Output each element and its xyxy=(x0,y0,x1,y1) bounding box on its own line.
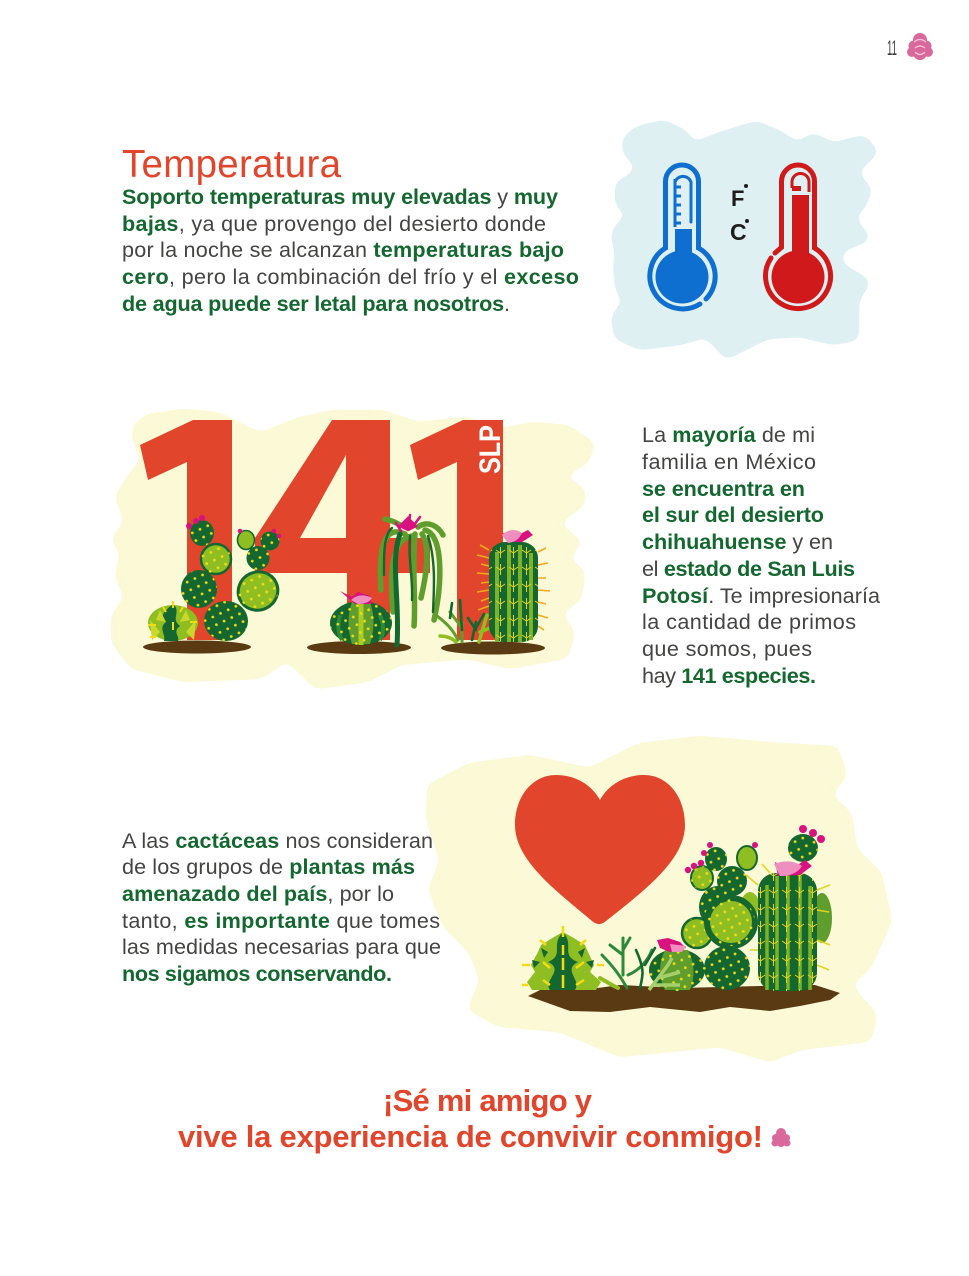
illustration: heart and cacti xyxy=(430,740,888,1058)
text block: family in Mexico: hay 141 especies. xyxy=(642,663,816,688)
text block: family in Mexico: chihuahuense y en xyxy=(642,529,833,554)
soil xyxy=(528,985,840,1012)
text block: family in Mexico: Potosí. Te impresionaría xyxy=(642,583,881,608)
heart xyxy=(515,775,685,924)
text block: threatened cacti: A las cactáceas nos consideran xyxy=(122,828,433,853)
text: 11 xyxy=(887,37,897,60)
branched cactus xyxy=(600,938,655,988)
hanging cactus xyxy=(380,515,443,645)
prickly pear cactus xyxy=(682,842,759,990)
title: Temperatura xyxy=(122,143,342,186)
text block: threatened cacti: amenazado del país, por lo xyxy=(122,881,394,906)
closing message: vive la experiencia de convivir conmigo! xyxy=(178,1119,763,1154)
text block: family in Mexico: la cantidad de primos xyxy=(642,609,856,634)
text block: family in Mexico: el estado de San Luis xyxy=(642,556,855,581)
scale labels xyxy=(730,184,749,245)
text block: temperature: de agua puede ser letal para nosotros. xyxy=(122,291,510,316)
text block: temperature: Soporto temperaturas muy elevadas y muy xyxy=(122,184,558,209)
text block: family in Mexico: La mayoría de mi xyxy=(642,422,815,447)
small round cactus xyxy=(148,601,198,641)
soil mounds xyxy=(143,640,545,654)
text block: temperature xyxy=(122,184,579,316)
tall columnar cactus with flower xyxy=(477,530,550,642)
illustration: 141 species xyxy=(115,413,591,685)
text block: family in Mexico xyxy=(642,422,881,688)
yellow paint background xyxy=(430,740,888,1058)
yellow paint background xyxy=(115,413,591,685)
text block: temperature: cero, pero la combinación del frío y el exceso xyxy=(122,264,579,289)
text block: family in Mexico: el sur del desierto xyxy=(642,502,824,527)
scale labels: C xyxy=(730,219,747,245)
prickly pear cactus xyxy=(181,515,284,641)
text block: threatened cacti: nos sigamos conservando. xyxy=(122,961,392,986)
hot thermometer xyxy=(766,165,831,309)
big number 141 xyxy=(140,420,503,640)
scale labels: F xyxy=(731,186,744,211)
text block: temperature: por la noche se alcanzan temperaturas bajo xyxy=(122,237,564,262)
SLP label: SLP xyxy=(474,425,507,474)
barrel cactus with flower xyxy=(330,591,392,645)
text block: family in Mexico: familia en México xyxy=(642,449,816,474)
small barrel cactus with flower xyxy=(649,938,705,991)
text block: family in Mexico: que somos, pues xyxy=(642,636,812,661)
text block: threatened cacti: tanto, es importante que tomes xyxy=(122,908,440,933)
text block: threatened cacti: las medidas necesarias para que xyxy=(122,934,441,959)
icon: pink flower ornament xyxy=(907,33,933,60)
illustration: thermometers xyxy=(615,124,874,355)
text block: family in Mexico: se encuentra en xyxy=(642,476,805,501)
cold thermometer xyxy=(650,165,715,309)
tall columnar cactus with flower xyxy=(746,825,832,991)
closing message xyxy=(178,1083,763,1154)
blue paint background xyxy=(615,124,874,355)
closing message: ¡Sé mi amigo y xyxy=(383,1083,593,1118)
stacked round cactus xyxy=(522,926,604,990)
text block: temperature: bajas, ya que provengo del desierto donde xyxy=(122,211,546,236)
text block: threatened cacti: de los grupos de plantas más xyxy=(122,854,415,879)
text block: threatened cacti xyxy=(122,828,441,986)
icon: small pink flower ornament xyxy=(772,1128,790,1147)
branched cactus xyxy=(437,600,490,642)
